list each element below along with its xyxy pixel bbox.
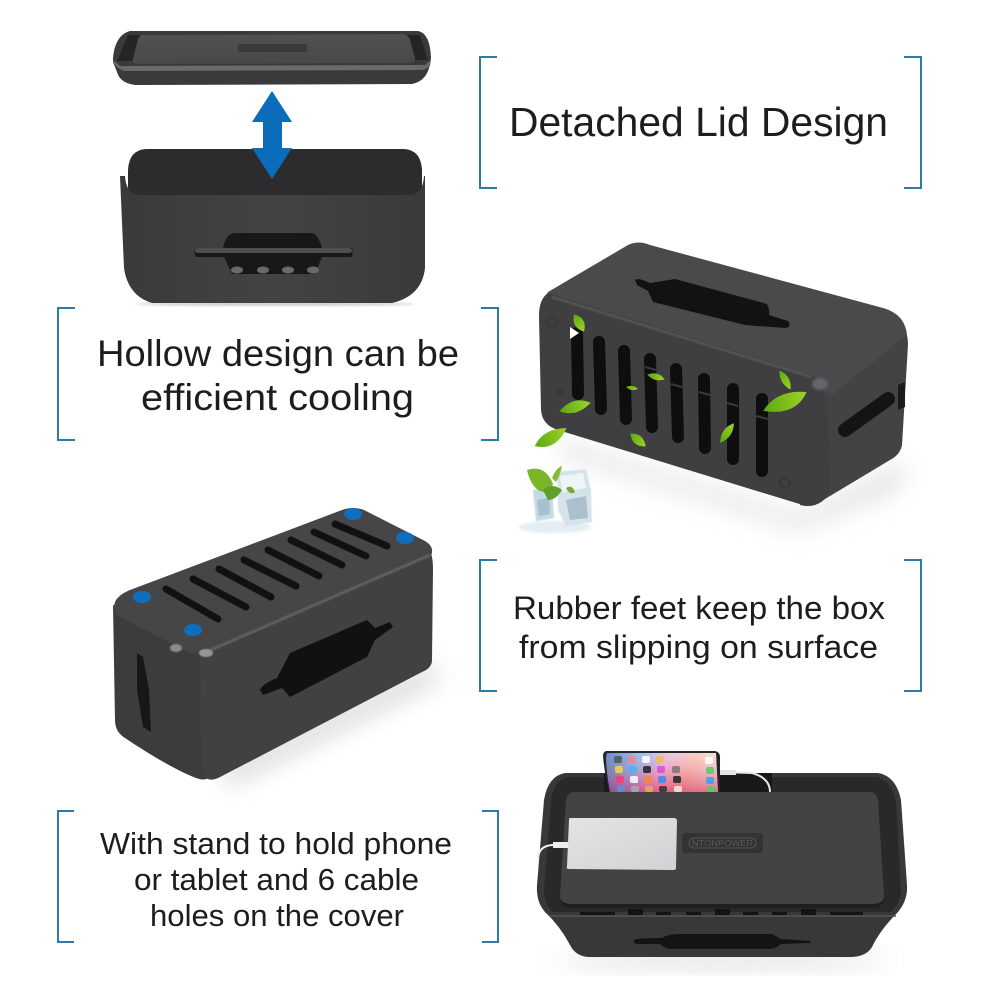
box shadow bbox=[560, 440, 905, 530]
bracket frame: hollow design bbox=[58, 308, 498, 440]
product: detached lid bbox=[113, 31, 431, 85]
heading: detached lid design: Detached Lid Design bbox=[509, 99, 888, 145]
mint leaves bbox=[527, 469, 553, 492]
lid surface bbox=[560, 792, 884, 904]
front handle slot bbox=[634, 934, 810, 949]
corner screw marks bbox=[547, 317, 790, 488]
box interior back wall bbox=[128, 149, 422, 196]
green leaves bbox=[532, 312, 809, 451]
text: rubber feet: from slipping on surface bbox=[519, 629, 878, 665]
text: hollow design cooling: Hollow design can be bbox=[97, 333, 459, 374]
tray inner well bbox=[544, 777, 901, 912]
text: stand and holes: With stand to hold phone bbox=[100, 826, 452, 861]
corner highlight bbox=[812, 378, 828, 390]
bracket frame: rubber feet bbox=[480, 560, 921, 691]
side cable hole bbox=[260, 620, 393, 697]
text: stand and holes bbox=[100, 826, 452, 933]
text: hollow design cooling bbox=[97, 333, 459, 418]
box shadow bbox=[557, 953, 887, 967]
handle slot with stand bbox=[194, 233, 352, 274]
phone bbox=[603, 751, 720, 792]
icon: ice cubes with mint bbox=[519, 466, 592, 533]
phone cable bbox=[720, 772, 770, 792]
text: rubber feet: Rubber feet keep the box bbox=[513, 590, 885, 626]
text: hollow design cooling: efficient cooling bbox=[141, 377, 414, 418]
box top face bbox=[547, 242, 907, 395]
end face bbox=[113, 605, 210, 780]
product: box upside down showing rubber feet bbox=[113, 508, 440, 785]
front face bbox=[200, 552, 433, 780]
product: box with phone and power bank bbox=[537, 751, 907, 967]
small white gap in first slot bbox=[570, 327, 579, 339]
lid logo plate bbox=[238, 44, 307, 52]
small ice cube bbox=[533, 487, 554, 521]
top cable slot bbox=[635, 279, 790, 328]
power bank bbox=[567, 818, 677, 870]
product: vented box with leaves bbox=[532, 242, 908, 530]
side cable slot bbox=[845, 382, 905, 430]
cable hole row bbox=[580, 909, 863, 915]
brand plate: NTONPOWER bbox=[692, 838, 753, 848]
product: open box base bbox=[120, 149, 425, 306]
text: stand and holes: or tablet and 6 cable bbox=[134, 862, 419, 897]
top face bbox=[114, 508, 432, 654]
large ice cube bbox=[557, 469, 592, 526]
bracket frame: detached lid bbox=[480, 57, 921, 188]
charging cable bbox=[538, 842, 568, 858]
box shadow bbox=[220, 665, 440, 785]
top ventilation slats bbox=[166, 524, 387, 619]
slot crossbars bbox=[645, 367, 768, 419]
box side face bbox=[800, 308, 908, 506]
text: rubber feet bbox=[513, 590, 885, 665]
lid tray rim bbox=[113, 31, 431, 85]
box front face bbox=[120, 176, 425, 303]
arrow: lift lid up and down bbox=[252, 91, 292, 179]
blue rubber feet bbox=[133, 508, 414, 636]
bracket frame: stand and cable holes bbox=[58, 811, 498, 942]
text: stand and holes: holes on the cover bbox=[150, 898, 404, 933]
brand plate bbox=[682, 833, 763, 853]
lid top surface bbox=[132, 34, 415, 64]
tray body bbox=[537, 773, 907, 957]
end slit bbox=[137, 653, 151, 732]
box front face bbox=[539, 293, 830, 506]
ventilation slots bbox=[577, 333, 762, 471]
